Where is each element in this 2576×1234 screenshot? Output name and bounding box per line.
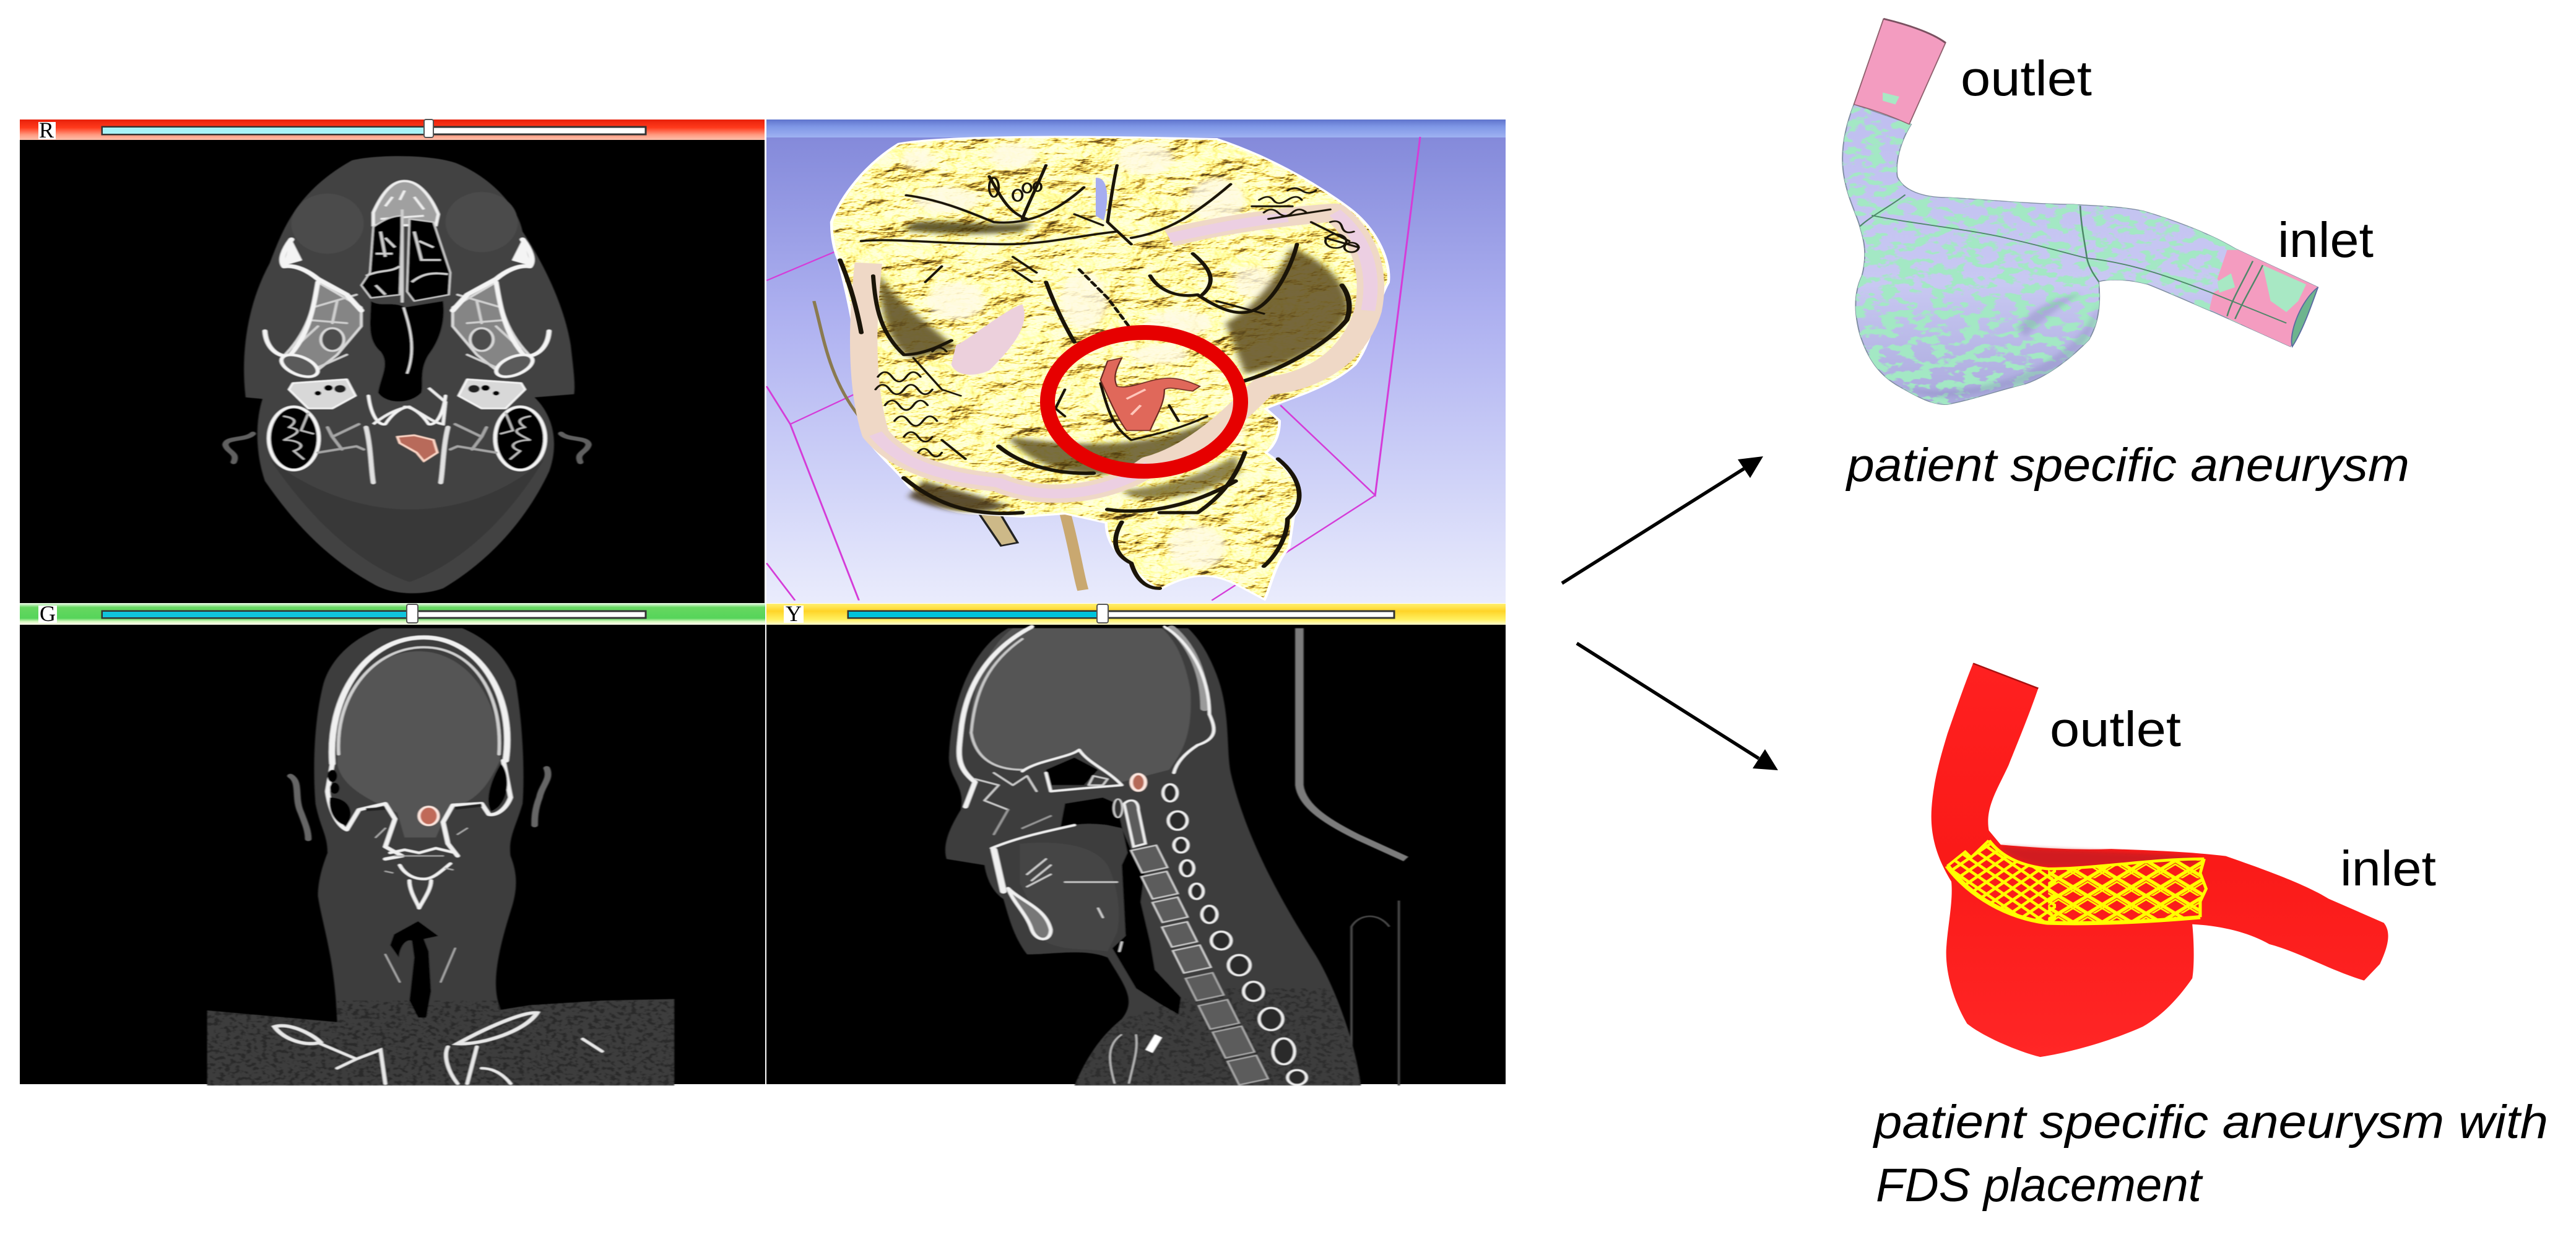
dark shaded cavities [878, 222, 1349, 511]
arrow: to patient specific aneurysm [1562, 456, 1763, 583]
sagittal slice header bar [766, 601, 1506, 626]
coronal head cross-section [207, 628, 674, 1085]
caption: patient specific aneurysm: patient specific aneurysm [1845, 439, 2409, 492]
caption: patient specific aneurysm with FDS placement: patient specific aneurysm with [1873, 1096, 2548, 1149]
panel: aneurysm with FDS placement [1873, 663, 2548, 1212]
skull rendering [814, 138, 1387, 598]
axial slice header bar: R [39, 118, 54, 142]
bright bone highlights [901, 143, 1276, 570]
red vessel model with stent [1932, 663, 2388, 1057]
label: inlet: inlet [2278, 212, 2374, 267]
coronal slice header bar [20, 601, 765, 626]
label: outlet: outlet [2050, 702, 2181, 757]
3D view header bar [766, 119, 1506, 137]
caption: patient specific aneurysm with FDS placement: FDS placement [1876, 1159, 2203, 1212]
axial slice header bar [20, 118, 765, 142]
label: inlet: inlet [2340, 841, 2436, 896]
sagittal head cross-section [945, 627, 1406, 1085]
axial skull cross-section [225, 156, 589, 593]
caption: patient specific aneurysm with FDS placement [1873, 1096, 2548, 1212]
coronal slice header bar: G [40, 601, 56, 626]
panel: axial CT slice [20, 118, 765, 603]
label: outlet: outlet [1961, 51, 2092, 106]
sagittal slice header bar: Y [786, 601, 802, 626]
arrow: to aneurysm with FDS [1577, 643, 1778, 770]
bounding box lines [766, 137, 1420, 601]
panel: sagittal CT slice [766, 601, 1506, 1085]
panel: coronal CT slice [20, 601, 765, 1085]
highlight circle around aneurysm [1047, 332, 1241, 471]
panel: patient specific aneurysm mesh [1836, 19, 2409, 492]
aneurysm mesh model [1836, 19, 2326, 409]
stent lattice [1953, 843, 2203, 921]
panel: 3D skull volume rendering [766, 119, 1506, 603]
